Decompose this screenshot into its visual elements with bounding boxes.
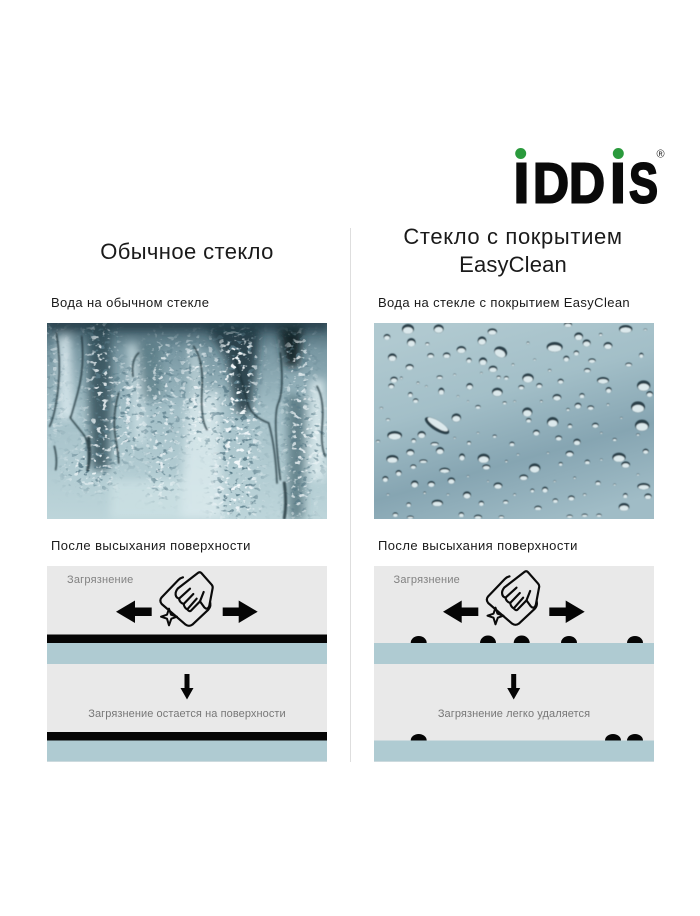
icon: hand with cloth <box>487 571 539 625</box>
label: dirt: Загрязнение <box>394 574 460 586</box>
dirt spots, upper surface <box>411 636 643 643</box>
subheading: water on ordinary glass: Вода на обычном стекле <box>51 295 209 310</box>
panel: coated glass diagram <box>374 566 654 762</box>
arrow: down <box>180 674 194 700</box>
arrow: left <box>443 600 478 623</box>
surface 1: dirt layer <box>47 634 327 643</box>
heading: ordinary glass: Обычное стекло <box>100 239 274 264</box>
icon: hand with cloth <box>160 572 213 626</box>
subheading: after drying, left: После высыхания поверхности <box>51 538 251 553</box>
dirt spots, lower surface <box>411 734 643 740</box>
arrow: left <box>116 600 152 623</box>
panel: ordinary glass diagram <box>47 566 327 762</box>
surface 2: dirt layer <box>47 732 327 740</box>
arrow: right <box>549 600 585 623</box>
surface 1: glass <box>47 643 327 664</box>
arrow: down <box>507 674 520 700</box>
surface 1: glass <box>374 643 654 664</box>
arrow: right <box>223 600 258 623</box>
label: dirt remains on surface: Загрязнение остается на поверхности <box>88 708 286 720</box>
heading: coated glass: EasyClean <box>459 252 567 277</box>
heading: coated glass: Стекло с покрытием <box>403 224 623 249</box>
surface 2: glass <box>47 740 327 762</box>
surface 2: glass <box>374 740 654 762</box>
logo: IDDIS: ® <box>656 148 665 160</box>
logo: IDDIS <box>514 148 665 210</box>
subheading: after drying, right: После высыхания поверхности <box>378 538 578 553</box>
photo: droplets on coated glass <box>374 323 654 519</box>
photo: water streaks on ordinary glass <box>47 323 636 740</box>
column divider <box>350 228 351 762</box>
label: dirt removes easily: Загрязнение легко удаляется <box>438 708 590 720</box>
label: dirt: Загрязнение <box>67 574 134 586</box>
heading: coated glass <box>403 224 623 277</box>
subheading: water on coated glass: Вода на стекле с покрытием EasyClean <box>378 295 630 310</box>
